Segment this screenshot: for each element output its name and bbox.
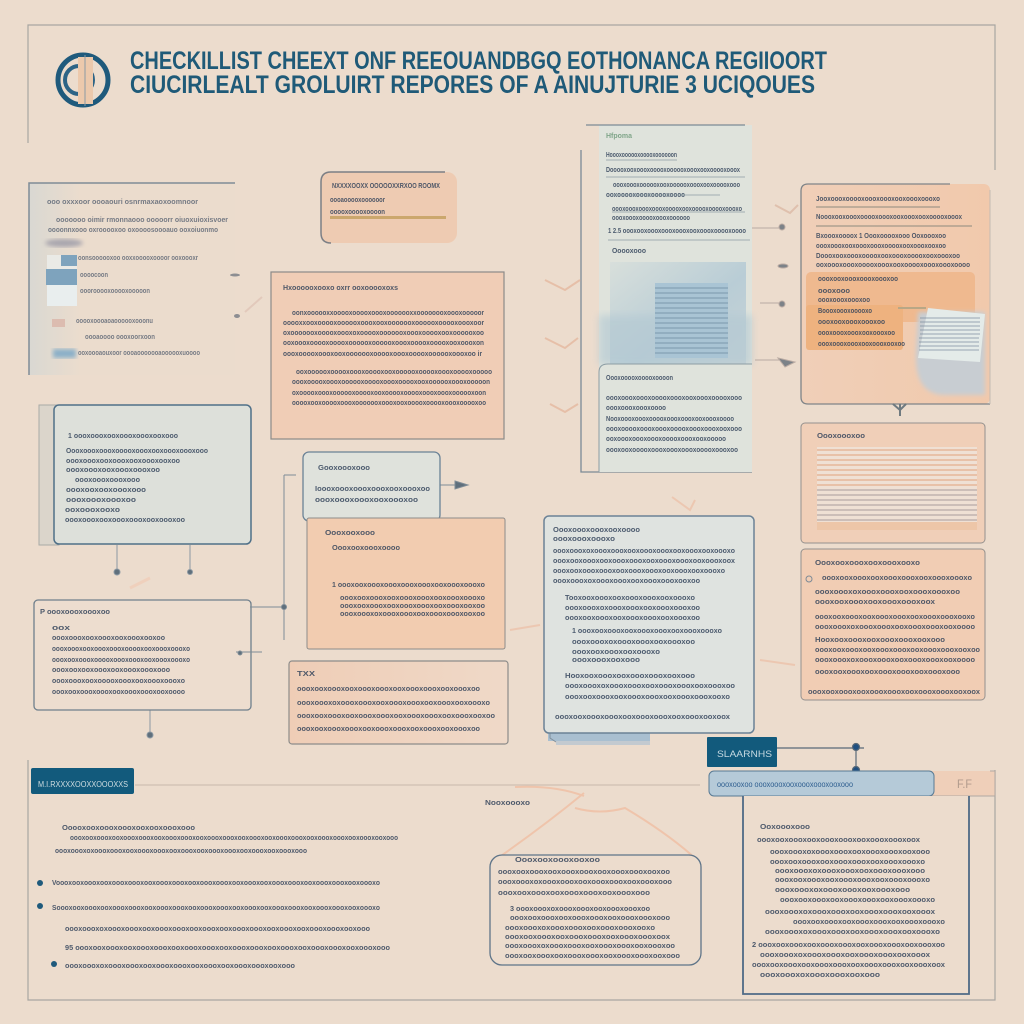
panel: tall report column: 1 2.5 oooxooxoooxoooxoooxooxoooxooooxoooo xyxy=(608,226,746,235)
panel: rounded bottom note: oooxooxoooxooxoooxoooxooxoooxoooxooo xyxy=(510,913,670,922)
panel: left lower note: oooxoooxooxoooxoooxooooxooxoooxoooxo xyxy=(52,644,190,653)
faded panel text: ooxoooaouxoor oooaooooooaoooooxuoooo xyxy=(78,348,200,357)
panel: left note: oooxoooxooxoooxooxoooxooxoo xyxy=(66,456,180,465)
panel: blue report sheet: oooxooxoooxooxoooxoooxooxoooxoooxooxoooxoox xyxy=(553,556,736,565)
panel: tall report column: ooxooooxoooxooooxoooo xyxy=(606,190,685,199)
panel: peach lower note: oooxooxoooxooxoooxoooxooxoooxoooxooxoooxooxoo xyxy=(297,711,495,720)
panel: left lower note xyxy=(34,600,251,710)
panel: striped chart note: Oooxoooxoo xyxy=(817,431,865,440)
panel: tall report column: oooxoooxoooooxooxoooooxoooxooxooooxooo xyxy=(613,180,740,189)
text block: bottom left notes: Nooxoooxo xyxy=(485,798,530,807)
orange highlight box: oooxoooxoooxoo xyxy=(818,295,870,304)
panel: right upper report: ooxoooxoooxooooxoooxooxooooxoooxoooxoooo xyxy=(816,260,970,269)
panel: bottom right report: oooxoooxoxoooxoooxooxoooxoooxooxooox xyxy=(760,950,931,959)
lower note: oooxooooxoooxoooxooooxoooxoooxooxooo xyxy=(606,424,742,433)
panel: peach lower note xyxy=(289,661,508,744)
lower note: Nooxoooxoooxooooxoooxoooxooxoooxoooo xyxy=(606,414,734,423)
panel: left note: oooxoooxoooxooo xyxy=(75,475,140,484)
icon: blurred smudge xyxy=(45,239,83,247)
panel: right lower note: oooxooxoooxooxoooxoooxooxoooxoooxooxoox xyxy=(808,687,981,696)
connector: middle bracket xyxy=(236,475,468,655)
panel: blue report sheet: oooxoooxoxoooxoooxooxoooxoooxooxoo xyxy=(553,576,700,585)
panel: blue report sheet: Tooxooxoooxooxoooxoooxooxoooxo xyxy=(565,593,695,602)
orange highlight box: Boooxoooxooooxo xyxy=(818,306,872,315)
panel: right upper report: Noooxooxoooxooooxoooxooxoooxooxooooxooox xyxy=(816,212,963,221)
panel: right lower note xyxy=(801,549,985,700)
text block: bottom left notes: oooxoooxoxoooxoooxooxoooxoooxooxoooxooxoooxoooxooxooo xyxy=(65,961,295,970)
panel: right lower note: oooxooxoooxooxoooxoooxooxoooxoooxooxo xyxy=(815,612,975,621)
panel: left lower note: oooxooxooxoooxooxoooxoooxooo xyxy=(52,665,170,674)
bar: section heading xyxy=(709,771,995,796)
panel: blue report sheet: Hooxooxoooxooxoooxoooxooxooo xyxy=(565,671,695,680)
panel: bottom right report: oooxooxoooxooxoooxoooxooxoooxoooxoox xyxy=(757,835,921,844)
lower note: oooxooxooooxoooxoooxoooxooooxoooxoo xyxy=(606,445,738,454)
panel: left note xyxy=(39,405,251,545)
faded panel text: ooooooo oimir rmonnaooo ooooorr oiuoxuioxisvoer xyxy=(56,215,228,224)
panel: right lower note: oooxoooxoxoooxoooxooxoooxoooxoo xyxy=(815,587,960,596)
panel: rounded bottom note: 3 oooxoooxoxoooxoooxooxoooxoooxoo xyxy=(510,904,650,913)
panel: faded checklist xyxy=(29,183,235,375)
connector: header to bar xyxy=(777,744,864,774)
panel: top summary note: ooooxooooxoooon xyxy=(330,207,385,216)
panel: blue report sheet: Oooxoooxoooxooxoooo xyxy=(553,525,640,534)
panel: left note: oooxoooxooxoooxoooxoo xyxy=(66,465,160,474)
panel: orange central note: Oooxooxooo xyxy=(325,528,375,537)
stripes xyxy=(817,447,977,530)
bullets xyxy=(37,880,57,967)
panel: blue report sheet: oooxooxoooxoooxooxoooxoooxooxoooxooxoooxo xyxy=(553,566,725,575)
panel: central report: Hxoooooxooxo oxrr ooxooooxoxs xyxy=(283,283,398,292)
panel: right lower note: oooxooxoooxooxoooxoooxooxoooxooo xyxy=(815,667,960,676)
orange highlight box: oooxoooxoooxooxoooxooxoo xyxy=(818,339,905,348)
panel: right lower note: oooxooxoooxooxoooxoooxoox xyxy=(815,597,936,606)
panel: central report: ooxoooooxooooxoooxooooxooxoooooxooooxoooxooooxooooo xyxy=(296,367,492,376)
panel: rounded bottom note: oooxoooxoxoooxoooxooxoooxoooxooxoooxooo xyxy=(498,877,672,886)
lower note xyxy=(599,364,752,472)
panel: rounded bottom note: oooxooxoooxooxoooxoooxooxoooxooo xyxy=(498,888,650,897)
title: CIUCIRLEALT GROLUIRT REPORES OF A AINUJTURIE 3 UCIQOUES xyxy=(130,71,815,99)
panel: blue report sheet: oooxoooxoxoooxoooxooxoooxoooxooxoooxooxoooxo xyxy=(553,546,735,555)
orange highlight box: oooxooxoooxoooxoo xyxy=(818,317,885,326)
faded panel text: ooooxoooaoaoooooxooonu xyxy=(76,316,153,325)
label: section header right xyxy=(707,737,777,767)
panel: right lower note: oooxooxoooxooxoooxoooxooxoooxoooxooxoo xyxy=(815,645,980,654)
icon: small table xyxy=(46,255,77,306)
panel: bottom right report: oooxoooxoxoooxoooxooxoooxoooxooxoooxo xyxy=(765,927,940,936)
faded panel text: ooo oxxxoor oooaouri osnrmaxaoxoomnoor xyxy=(47,197,198,206)
panel: central report: oxooooooxooooxoooxoxooooxooooooxoooxooooxooxoooooxoo xyxy=(283,328,484,337)
icon: pink tag xyxy=(52,319,65,327)
lower note: Oooxooooxooooxoooon xyxy=(606,373,673,382)
panel: bottom right report: oooxoooxoxoooxoooxooxoooxoooxooxooo xyxy=(770,847,930,856)
connectors: faint peach arrows xyxy=(510,497,795,665)
panel: central report: ooooxooxooooxoooxooooooxoooxooxooooxooooxoooxooooxoo xyxy=(292,398,486,407)
panel: central report: oonxoooooxxooooxooooxoooxooooooxxoooooooxoooxooooor xyxy=(292,308,484,317)
text block: bottom left notes: oooxooxoooxooxoooxoooxooxoooxoooxooxoooxoooxooxoooxooxoooxoooxooxoooxoooxooxoooxooxooo xyxy=(70,833,398,842)
panel: central report xyxy=(271,272,504,439)
panel: blue report sheet: oooxoooxooxooo xyxy=(572,655,640,664)
panel: small blue note: oooxoooxoooxooxoooxoo xyxy=(315,495,418,504)
panel: right lower note: oooxooxoooxooxoooxoooxooxoooxoooxo xyxy=(822,573,972,582)
panel: left note: oooxoooxooxoooxoooxooxoooxoo xyxy=(65,515,185,524)
panel: peach lower note: oooxoooxoxoooxoooxooxoooxoooxooxoooxooxoooxo xyxy=(297,698,490,707)
panel: tall report column: Ooooxooo xyxy=(612,246,646,255)
panel: left note: 1 oooxoooxooxoooxoooxooxooo xyxy=(68,431,178,440)
panel: bottom right report: oooxooxoooxooxoooxoooxooxoooxoooxo xyxy=(780,895,935,904)
hanger arcs xyxy=(498,787,697,860)
icon: junction mark xyxy=(893,404,906,416)
panel: blue report sheet: oooxoooxoxoooxoooxooxoooxoo xyxy=(572,637,695,646)
panel: left note: Oooxoooxoooxooooxoooxooxoooxoooxooo xyxy=(66,446,208,455)
panel: small blue note xyxy=(303,452,440,521)
panel: left lower note: oooxoooxooxoooxooxoooxooxoo xyxy=(52,633,165,642)
panel: bottom right report: Ooxoooxooo xyxy=(760,822,810,831)
panel: rounded bottom note: oooxoooxoxoooxoooxooxoooxoooxooxoooxoo xyxy=(505,941,675,950)
connector: left panels xyxy=(114,545,192,738)
icon: blue tag xyxy=(53,349,76,358)
orange highlight box: oooxooo xyxy=(818,286,850,295)
lower note: ooxoooxoooxoooxooooxoooxooxooooo xyxy=(606,434,726,443)
panel: blue report sheet: oooxooxoooxoooxooxoooxoooxooxoooxooxoox xyxy=(555,712,731,721)
panel: blue report sheet: oooxoooxoxoooxoooxooxoooxoooxooxoooxoo xyxy=(565,681,735,690)
panel: striped chart note xyxy=(801,423,985,543)
panel: central report: ooooxxooxooooxoooooxoooxooxooooooxoooooxooooxoooxoor xyxy=(283,318,484,327)
panel: left lower note: oooxoooxooxooooxoooxooxoooxoooxo xyxy=(52,676,185,685)
panel: bottom right report: oooxoooxoxoooxoooxooxooo xyxy=(760,970,880,979)
panel: central report: oooxooooxoooxoooooxooooxoooxooooxooxoooooxoooxooooon xyxy=(292,377,490,386)
panel: bottom right report: oooxooxoooxooxoooxoooxooxoooxoooxo xyxy=(770,857,925,866)
faded panel text: oonsoooooxoo ooxxooooxoooor ooxoooxr xyxy=(78,253,198,262)
faded panel text xyxy=(47,197,228,357)
text block: bottom left notes: Voooxooxoooxooxoooxoooxooxoooxoooxooxoooxoooxooxoooxooxoooxoooxooxoooxoooxooxoooxo xyxy=(52,878,380,887)
panel: left note: oooxoooxoooxoo xyxy=(66,495,136,504)
panel: right lower note: oooxoooxoxoooxoooxooxoooxoooxooxoooo xyxy=(815,655,975,664)
panel: right lower note: Hooxooxoooxooxoooxoooxooxooo xyxy=(815,635,945,644)
panel: blue report sheet xyxy=(544,516,754,745)
connector dots left xyxy=(230,274,262,318)
panel: right upper report: oooxoooxooxoooxoooxooooxooxoooxooxoo xyxy=(816,241,946,250)
faded panel text: ooorooooxooooxooooon xyxy=(80,286,150,295)
panel: tall report column: Dooooxooxoooxooooxoooooxoooxooxooooxooox xyxy=(606,165,741,174)
panel: rounded bottom note xyxy=(490,855,701,965)
panel: right upper report: Doooxooxoooxooooxooxoooxooooxooxoooxoo xyxy=(816,251,960,260)
panel: left lower note: oooxooxoooxoooxooxoooxoooxooxoooo xyxy=(52,687,185,696)
panel: bottom right report: oooxoooxoxoooxoooxooxoooxoooxooxooox xyxy=(765,907,936,916)
label: section header left: M.I.RXXXXOOXXOOOXXS xyxy=(38,780,128,789)
panel: top summary note: oooaooooxoooooor xyxy=(330,195,385,204)
icon: paper and device xyxy=(898,308,985,395)
panel: blue report sheet: 1 oooxooxoooxooxoooxoooxooxoooxoooxo xyxy=(572,626,722,635)
panel: central report: oxooooxoooxoooooxooooxooxooooxooooxoooxoooxoooooxoon xyxy=(292,388,486,397)
lower note: oooxoooxoooxooooxoooxooxoooxooooxooo xyxy=(606,393,742,402)
label: section header right: SLAARNHS xyxy=(717,749,772,759)
panel: left lower note: oox xyxy=(52,623,71,632)
lower note: oooxoooxoooxoooo xyxy=(606,403,666,412)
panel: left lower note: oooxooxoooxooooxoooxoooxooxoooxoooxo xyxy=(52,655,190,664)
text block: bottom left notes xyxy=(37,798,530,970)
faded panel text: oooocoon xyxy=(80,270,108,279)
panel: tall report column: oooxoooxooooxoooxoooooo xyxy=(612,213,690,222)
panel: rounded bottom note: oooxooxoooxooxoooxoooxooxoooxoooxooxooo xyxy=(505,951,680,960)
panel: blue report sheet: oooxoooxoxoooxoooxooxoooxoooxoo xyxy=(565,603,700,612)
faded panel text: oooonnxooo oxrooooxoo oxoooosoooauo ooxoiuonmo xyxy=(48,225,218,234)
panel: orange central note: 1 oooxooxoooxoooxoooxoooxooxoooxoooxo xyxy=(332,580,485,589)
bar: section heading: oooxooxoo oooxoooxooxoooxoooxooxooo xyxy=(717,780,853,789)
panel: rounded bottom note: oooxooxoooxooxoooxoooxooxoooxoooxoox xyxy=(505,932,671,941)
panel: orange central note: oooxooxoooxooxoooxoooxooxoooxoooxo xyxy=(340,593,485,602)
orange highlight box xyxy=(806,272,975,350)
accent bar xyxy=(330,216,446,219)
panel: central report: oooxooooxoooxooxooooooxooooxoooxooooxoooooxoooxoo ir xyxy=(283,349,482,358)
faded panel text: oooaoooo oooxoorxoon xyxy=(85,332,155,341)
stacked sheets under report xyxy=(548,733,650,745)
image: document scan xyxy=(599,262,752,370)
panel: right lower note: Oooxooxoooxooxoooxooxo xyxy=(815,558,920,567)
panel: small blue note: Ioooxoooxoooxoooxooxoooxoo xyxy=(315,484,430,493)
label: section header left xyxy=(31,768,134,794)
panel: blue report sheet: oooxoooxoooxo xyxy=(553,534,615,543)
panel: rounded bottom note: oooxoooxoxoooxoooxooxoooxoooxooxo xyxy=(505,923,655,932)
orange highlight box: oooxooxoooxoooxoooxoo xyxy=(818,274,898,283)
panel: bottom right report: oooxooxoooxooxoooxoooxooxoooxoooxooxoooxoox xyxy=(752,960,946,969)
arrows: column connectors xyxy=(545,205,798,412)
panel: peach lower note: oooxooxoooxoooxooxoooxoooxooxoooxooxoooxoo xyxy=(297,724,480,733)
panel: left note: ooxoooxooxo xyxy=(65,505,120,514)
panel: peach lower note: TXX xyxy=(297,669,315,678)
panel: left note: oooxooxooxoooxooo xyxy=(66,485,146,494)
text block: bottom left notes: Soooxooxoooxooxoooxoooxooxoooxoooxooxoooxoooxooxoooxooxoooxoooxooxoooxoooxooxoooxo xyxy=(52,903,380,912)
panel: tall report column: Hfpoma xyxy=(606,131,633,140)
panel: blue report sheet: oooxooxoooxooxoooxo xyxy=(572,647,660,656)
panel: right lower note: oooxoooxoxoooxoooxooxoooxoooxooxoooo xyxy=(815,622,975,631)
panel: orange central note: Oooxooxoooxoooo xyxy=(332,543,400,552)
panel: blue report sheet: oooxooxoooxooxoooxoooxooxoooxoo xyxy=(565,613,700,622)
panel: central report: ooxoooxooooxooooxoooooxoooooxoooxooooxooooxooxoooxon xyxy=(283,338,484,347)
panel: bottom right report xyxy=(743,796,969,994)
text block: bottom left notes: Ooooxooxoooxoooxooxooxoooxooo xyxy=(62,823,195,832)
panel: right upper report: Bxoooxoooox 1 Oooxooooxooo Ooxoooxoo xyxy=(816,231,946,240)
bullet xyxy=(806,576,812,582)
panel: orange central note: oooxooxoooxooxoooxoooxooxoooxooxoo xyxy=(340,601,485,610)
panel: small blue note: Gooxoooxooo xyxy=(318,463,370,472)
panel: left lower note: P oooxoooxoooxoo xyxy=(40,607,110,616)
panel: tall report column: Hoooxoooooxooooxoooooon xyxy=(606,150,677,159)
section rule xyxy=(135,784,700,786)
text block: bottom left notes: oooxoooxoxoooxoooxooxoooxoooxooxoooxooxoooxoooxooxoooxooxoooxooo xyxy=(55,846,307,855)
bar: section heading: F.F xyxy=(957,777,972,791)
text block: bottom left notes: oooxoooxoxoooxoooxooxoooxoooxooxoooxooxoooxoooxooxoooxooxoooxoooxooxooo xyxy=(65,924,370,933)
panel: blue report sheet: oooxooxoooxooxoooxoooxooxoooxoooxooxo xyxy=(565,692,730,701)
text block: bottom left notes: 95 oooxooxoooxooxoooxoooxooxoooxoooxooxoooxoooxooxoooxooxoooxoooxooxoooxooo xyxy=(65,943,390,952)
panel: orange central note: oooxoooxoxoooxoooxooxoooxoooxooxoo xyxy=(340,609,485,618)
title: CHECKILLIST CHEEXT ONF REEOUANDBGQ EOTHONANCA REGIIOORT xyxy=(130,47,827,75)
panel: peach lower note: oooxooxoooxooxoooxoooxooxoooxoooxooxoooxoo xyxy=(297,684,480,693)
panel: rounded bottom note: Oooxooxoooxooxoo xyxy=(515,855,600,864)
orange highlight box: oooxoooxoooxooxoooxoo xyxy=(818,328,895,337)
panel: bottom right report: 2 oooxooxoooxooxoooxoooxooxoooxoooxooxoooxoo xyxy=(752,940,945,949)
rules xyxy=(816,207,972,226)
panel: bottom right report: oooxoooxoxoooxoooxooxoooxoooxooo xyxy=(775,866,925,875)
title xyxy=(130,47,827,99)
panel: bottom right report: oooxooxoooxooxoooxoooxooxoooxoooxo xyxy=(793,917,945,926)
panel: rounded bottom note: oooxooxoooxooxoooxoooxooxoooxoooxooxoo xyxy=(498,867,670,876)
panel: tall report column: oooxoooxoooxoooxooooxooxooooxooooxoooxo xyxy=(612,204,742,213)
panel: bottom right report: oooxooxoooxooxoooxoooxooxoooxoooxo xyxy=(775,875,930,884)
panel: right upper report xyxy=(801,184,990,416)
icon: circular logo xyxy=(58,55,108,106)
panel: top summary note xyxy=(321,172,457,243)
panel: orange central note xyxy=(307,518,505,649)
panel: top summary note: NXXXXOOXX OOOOOXXRXOO ROOMX xyxy=(332,181,440,190)
panel: right upper report: Jooxoooxooooxoooxoooxooxoooxoooxo xyxy=(816,194,940,203)
panel: bottom right report: oooxoooxoxoooxoooxooxoooxooo xyxy=(775,885,910,894)
panel: tall report column xyxy=(581,125,752,472)
rules xyxy=(606,160,750,240)
